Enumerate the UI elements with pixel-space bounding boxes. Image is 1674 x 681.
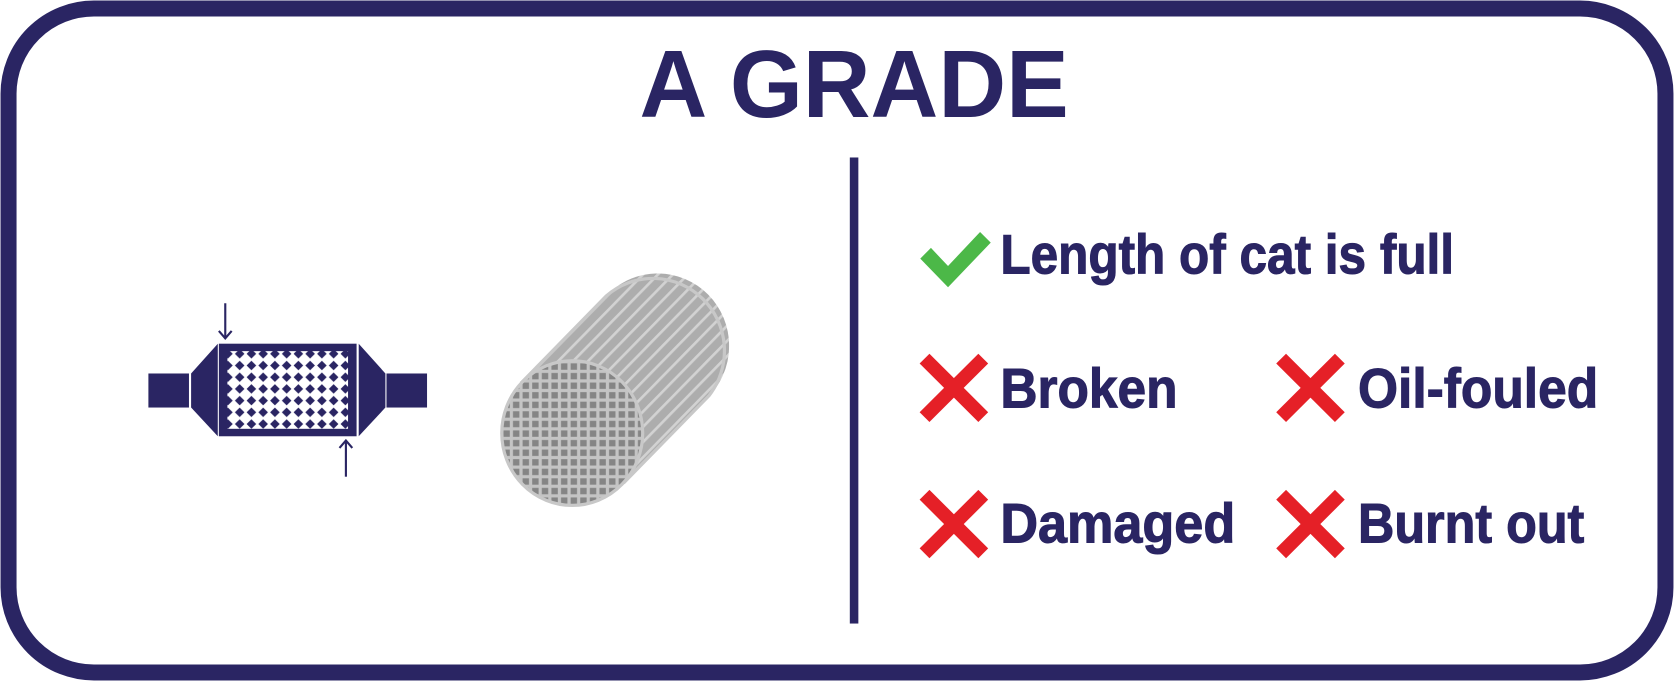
arrow: down — [219, 303, 232, 338]
arrow: up — [339, 441, 352, 477]
icon: cross damaged — [925, 495, 983, 553]
text: damaged: Damaged — [1000, 493, 1235, 555]
text: oil-fouled: Oil-fouled — [1358, 358, 1598, 420]
icon: cross broken — [925, 359, 983, 417]
text: broken: Broken — [1000, 358, 1178, 420]
text: length of cat is full: Length of cat is full — [1000, 224, 1454, 285]
text: burnt out: Burnt out — [1358, 493, 1584, 555]
icon: cross oil-fouled — [1281, 359, 1340, 417]
divider line — [850, 157, 858, 624]
icon: check — [920, 232, 991, 287]
icon: catalytic converter diagram — [148, 303, 427, 477]
title: A GRADE — [639, 31, 1069, 138]
icon: ceramic honeycomb cylinder — [500, 274, 730, 507]
icon: cross burnt out — [1281, 495, 1340, 553]
